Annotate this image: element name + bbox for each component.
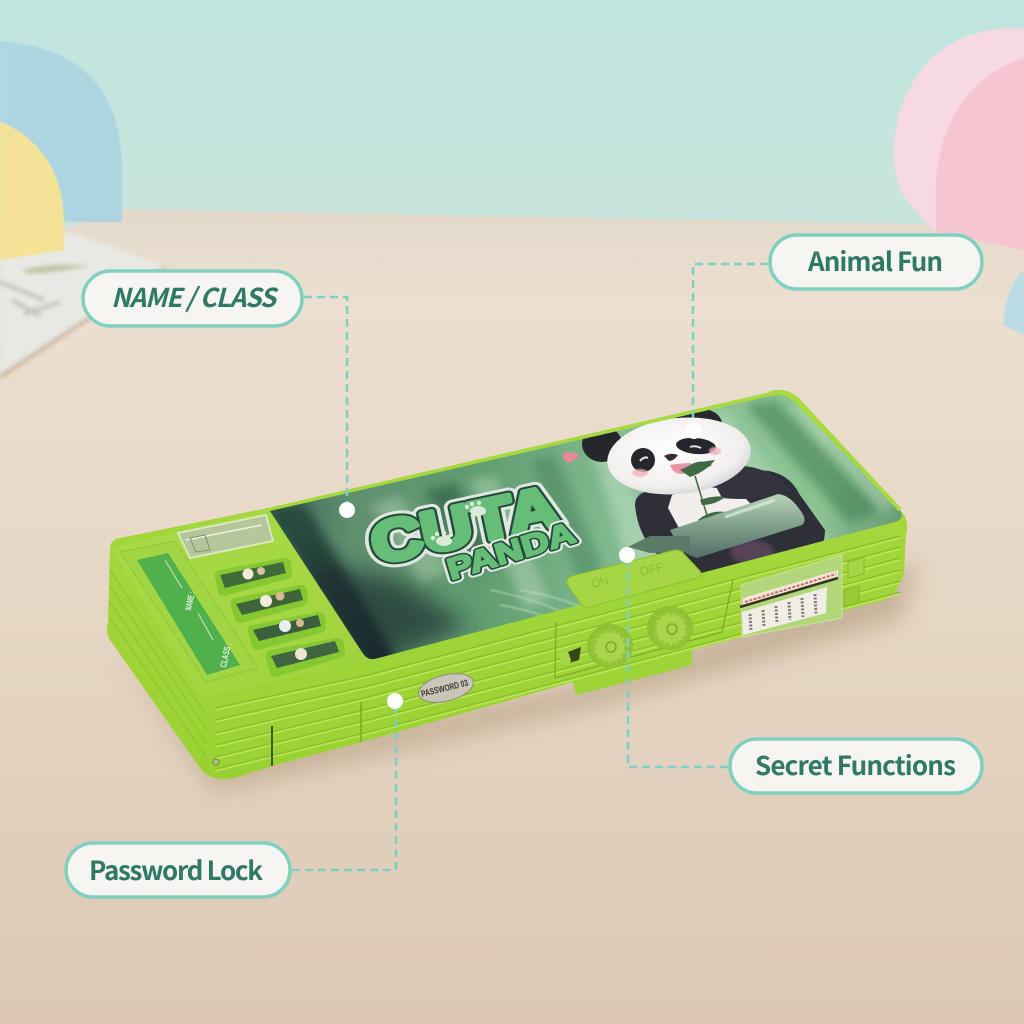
- bamboo stalk: [670, 494, 805, 558]
- password badge: [416, 669, 476, 707]
- button 1: [214, 558, 292, 596]
- title word: CUTA: CUTA: [365, 474, 565, 577]
- anchor dot: [339, 502, 355, 518]
- heart: [562, 452, 579, 463]
- cheeks: [632, 447, 721, 477]
- background wall: [0, 0, 1024, 230]
- eye glints: [640, 446, 701, 461]
- nose: [664, 454, 678, 461]
- clear window: [178, 515, 273, 558]
- tongue: [670, 463, 691, 474]
- leader line: [304, 297, 347, 504]
- panda foot highlight: [730, 540, 774, 564]
- on/off slide tab: OFF: [638, 560, 665, 579]
- table surface: [0, 209, 1024, 1024]
- title word: PANDA: PANDA: [443, 517, 579, 587]
- title word: CUTA: CUTA: [365, 474, 565, 577]
- title word: PANDA: PANDA: [443, 517, 579, 587]
- lid: [270, 394, 902, 660]
- pencil case: [107, 385, 920, 779]
- pill label: [770, 235, 982, 289]
- pill label: [66, 843, 290, 897]
- decorative pink arch, back: [894, 28, 1024, 240]
- left ear: [582, 431, 621, 462]
- grass highlights: [490, 588, 580, 616]
- lid title: [365, 474, 579, 587]
- on/off slide tab: [567, 550, 701, 607]
- right ear: [676, 410, 722, 422]
- button 2: [230, 585, 308, 623]
- pill label: [83, 271, 302, 326]
- password badge: PASSWORD 03: [420, 678, 469, 699]
- text: class: CLASS :: [218, 642, 233, 668]
- inset panel area: [120, 541, 258, 682]
- lid background: [270, 394, 902, 660]
- left side ridges: [110, 570, 207, 758]
- right eye patch: [676, 438, 716, 454]
- timetable window: [740, 555, 842, 637]
- on/off slide tab: ON: [589, 573, 610, 591]
- label text: Animal Fun: [807, 242, 943, 279]
- title word: CUTA: CUTA: [365, 474, 565, 577]
- lid rim highlight: [770, 392, 900, 510]
- door seams: [272, 580, 733, 766]
- label text: NAME / CLASS: [111, 278, 279, 315]
- panda arm: [716, 466, 763, 499]
- panda head: [607, 418, 751, 494]
- button 3: [248, 612, 326, 650]
- panda illustration: [582, 408, 825, 578]
- right-side buttons: [844, 557, 864, 606]
- dark lower band: [300, 560, 470, 665]
- front knobs and slider: [558, 606, 693, 668]
- case body silhouette: [107, 391, 907, 779]
- paw prints: [431, 501, 486, 546]
- dark left corner: [268, 503, 400, 668]
- combination buttons: [214, 558, 345, 677]
- bamboo highlight: [725, 500, 775, 517]
- name and class label: [137, 553, 240, 675]
- decorative yellow arch: [0, 121, 64, 260]
- bamboo stem tip: [628, 536, 690, 553]
- label text: Secret Functions: [755, 746, 956, 783]
- open booklet on table: [0, 232, 168, 380]
- leader line: [693, 264, 768, 425]
- knob left: [587, 624, 633, 668]
- callout: Password Lock: [66, 693, 403, 897]
- callout: Animal Fun: [686, 235, 982, 439]
- anchor dot: [619, 547, 635, 563]
- front ridges: [215, 536, 900, 771]
- anchor dot: [686, 423, 702, 439]
- left eye patch: [631, 448, 655, 472]
- anchor dot: [387, 693, 403, 709]
- panda body: [635, 470, 825, 578]
- knob right: [647, 606, 693, 650]
- bamboo leaves: [680, 460, 725, 520]
- leader line: [628, 561, 728, 767]
- pill label: [730, 739, 982, 793]
- text: name: NAME :: [183, 591, 197, 611]
- decorative pink arch, front: [936, 58, 1024, 250]
- panda belly: [668, 487, 752, 530]
- callout: NAME / CLASS: [83, 271, 355, 518]
- screw: [213, 759, 219, 765]
- button 4: [266, 638, 345, 677]
- title word: PANDA: PANDA: [443, 517, 579, 587]
- decorative blue block: [1003, 270, 1024, 335]
- bamboo stripes: [370, 400, 895, 610]
- leader line: [292, 707, 396, 870]
- left top panel: [112, 510, 368, 696]
- decorative blue arch: [0, 41, 122, 222]
- slider: [558, 647, 581, 666]
- case shadow: [115, 560, 920, 790]
- label text: Password Lock: [89, 851, 263, 888]
- callout: Secret Functions: [619, 547, 982, 793]
